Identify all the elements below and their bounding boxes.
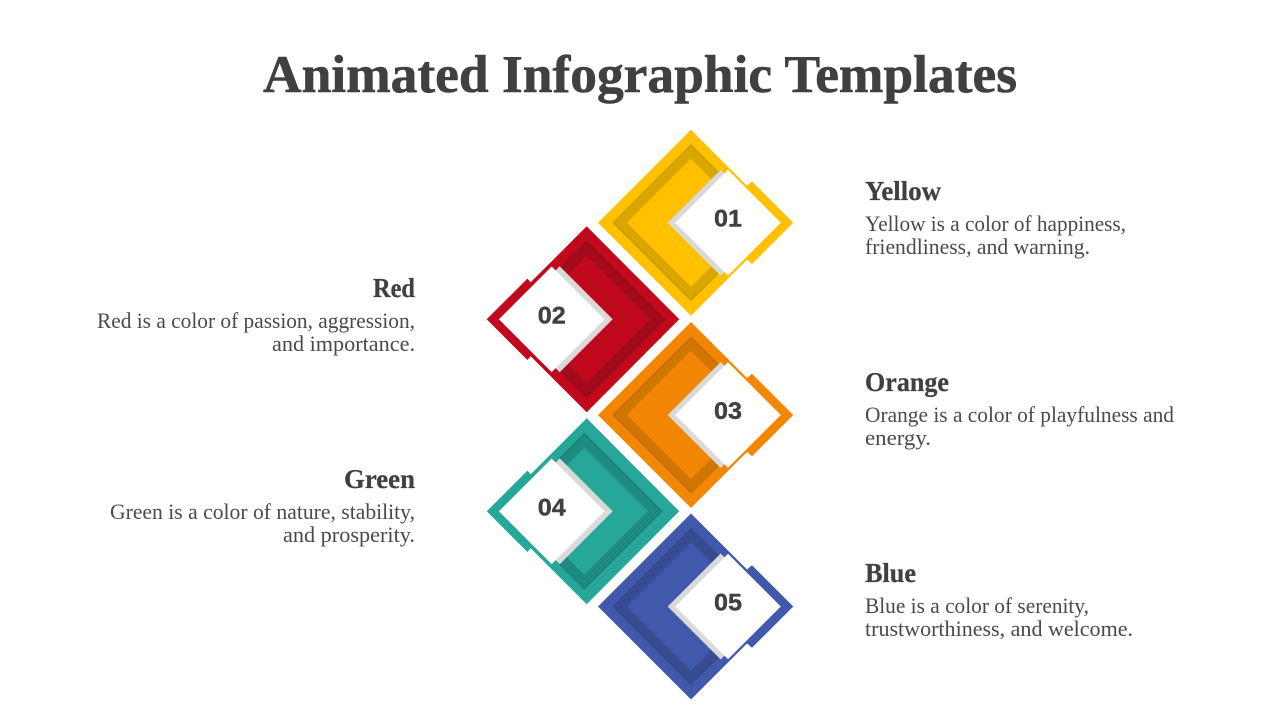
text block: orange [865, 367, 1174, 450]
text block: green: and prosperity. [283, 522, 415, 547]
text block: red: and importance. [272, 331, 415, 356]
text block: green [110, 464, 415, 547]
text block: red [97, 273, 415, 356]
text block: yellow [865, 176, 1126, 259]
diagram: orange step 03 [598, 322, 793, 508]
text block: yellow: Yellow is a color of happiness, [865, 211, 1126, 236]
number 04: 04 [538, 494, 566, 521]
number 05: 05 [714, 590, 742, 616]
diagram: yellow step 01 [598, 130, 793, 316]
text block: red: Red is a color of passion, aggression, [97, 308, 415, 333]
diagram: red step 02 [487, 226, 679, 412]
number 03: 03 [714, 398, 742, 425]
number 02: 02 [538, 302, 566, 329]
text block: blue: Blue [865, 558, 916, 588]
text block: blue: Blue is a color of serenity, [865, 593, 1089, 618]
text block: orange: Orange is a color of playfulness and [865, 402, 1174, 427]
text block: red: Red [373, 273, 415, 303]
text block: blue [865, 558, 1133, 641]
text block: green: Green is a color of nature, stability, [110, 499, 415, 524]
number 01: 01 [714, 206, 742, 233]
text block: green: Green [344, 464, 415, 494]
text block: yellow: Yellow [865, 176, 941, 206]
title: Animated Infographic Templates [263, 46, 1017, 104]
text block: yellow: friendliness, and warning. [865, 234, 1090, 259]
diagram: green step 04 [487, 418, 679, 604]
text block: orange: energy. [865, 425, 931, 450]
text block: blue: trustworthiness, and welcome. [865, 616, 1133, 641]
diagram: blue step 05 [598, 514, 793, 700]
text block: orange: Orange [865, 367, 949, 397]
